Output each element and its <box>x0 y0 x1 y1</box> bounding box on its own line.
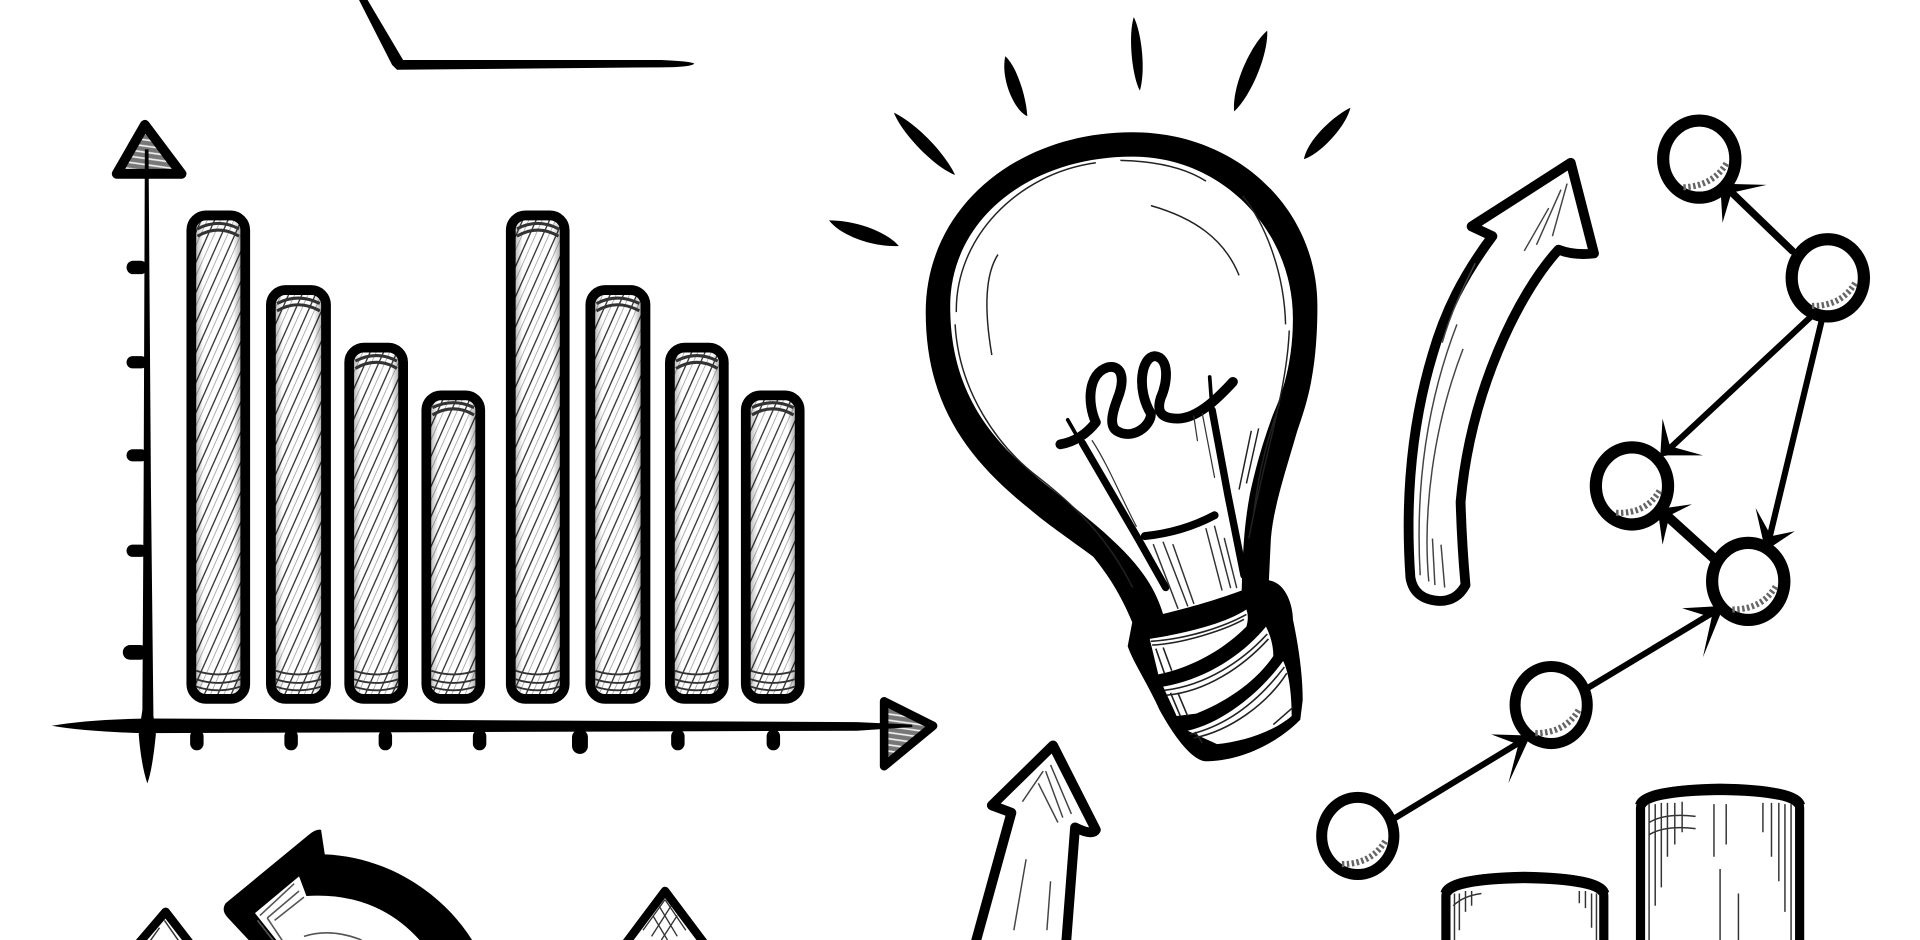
connectors <box>1396 187 1822 818</box>
small triangle left <box>129 912 199 940</box>
node 5 <box>1515 666 1587 744</box>
arrow barbs <box>1491 181 1795 783</box>
small triangle right <box>617 891 713 940</box>
glass highlights <box>955 160 1289 587</box>
lower right column short <box>1446 876 1604 940</box>
network diagram <box>1322 121 1864 875</box>
bar 5 <box>511 215 565 699</box>
icon: light bulb <box>829 17 1350 761</box>
bar 7 <box>670 348 724 699</box>
node 1 <box>1663 121 1735 198</box>
light rays <box>829 17 1350 246</box>
bar 6 <box>590 290 645 699</box>
screw base <box>1128 580 1303 761</box>
bar 3 <box>349 348 403 699</box>
node 4 <box>1712 543 1784 620</box>
glass stem <box>1068 377 1244 608</box>
y axis with arrow <box>117 125 182 783</box>
filament <box>1060 356 1233 444</box>
bar 2 <box>271 290 326 699</box>
bar 1 <box>191 215 245 699</box>
icon: curved arrow <box>1409 163 1594 601</box>
icon: circular arrow <box>224 830 480 940</box>
decorative angled line at top <box>359 0 694 70</box>
x axis with arrow <box>52 701 933 766</box>
node 3 <box>1596 447 1668 524</box>
icon: up arrow <box>972 745 1096 940</box>
bar 8 <box>746 395 800 699</box>
bulb glass interior <box>950 157 1293 614</box>
bar 4 <box>426 395 480 699</box>
node 2 <box>1792 239 1864 316</box>
lower right column tall <box>1641 788 1800 940</box>
bulb glass outer outline <box>926 132 1317 623</box>
bar chart <box>52 125 933 783</box>
node 6 <box>1322 797 1394 875</box>
